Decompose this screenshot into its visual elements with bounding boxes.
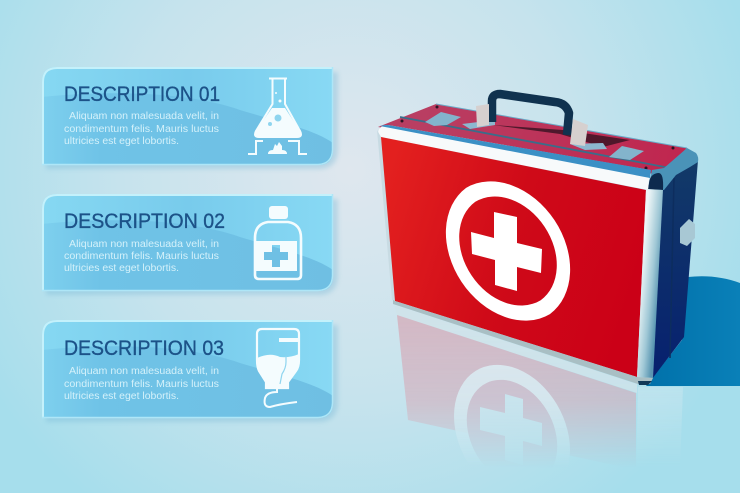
case top face: [378, 104, 687, 175]
first aid case: [377, 94, 698, 385]
heading: DESCRIPTION 02: [64, 210, 225, 233]
metal top rail: [378, 125, 650, 190]
heading: DESCRIPTION 01: [64, 83, 220, 106]
metal left rail: [377, 130, 396, 301]
rivets: [400, 106, 674, 170]
text block: Aliquam non malesuada velit, in: [69, 366, 219, 377]
case corner right: [648, 148, 698, 190]
text block: [64, 239, 219, 274]
text block: [64, 366, 219, 402]
text block: ultricies est eget lobortis.: [64, 263, 179, 274]
red front face: [381, 137, 646, 377]
handle: [462, 94, 607, 150]
text block: condimentum felis. Mauris luctus: [64, 124, 219, 135]
icon: medicine bottle: [255, 206, 301, 279]
emblem: red cross: [471, 212, 542, 291]
emblem: white ring: [446, 181, 570, 321]
icon: IV drip bag: [257, 329, 300, 407]
text block: condimentum felis. Mauris luctus: [64, 379, 219, 390]
text block: Aliquam non malesuada velit, in: [69, 239, 219, 250]
panel: description 02: [42, 194, 338, 295]
case reflection: [397, 315, 683, 450]
case shadow on floor: [646, 276, 740, 386]
latch right: [609, 146, 644, 160]
icon: flask on burner: [248, 78, 307, 154]
case side panel: [652, 160, 698, 379]
text block: Aliquam non malesuada velit, in: [69, 111, 219, 122]
panel: description 03: [42, 320, 338, 422]
text block: ultricies est eget lobortis.: [64, 391, 179, 402]
case side latch: [680, 219, 695, 246]
handle shadow: [493, 125, 630, 147]
panel: description 01: [42, 67, 338, 169]
heading: DESCRIPTION 03: [64, 337, 224, 360]
metal bottom rail: [393, 300, 653, 384]
metal right rail: [637, 189, 663, 378]
latch left: [425, 112, 461, 126]
text block: ultricies est eget lobortis.: [64, 136, 179, 147]
text block: condimentum felis. Mauris luctus: [64, 251, 219, 262]
text block: [64, 111, 219, 147]
